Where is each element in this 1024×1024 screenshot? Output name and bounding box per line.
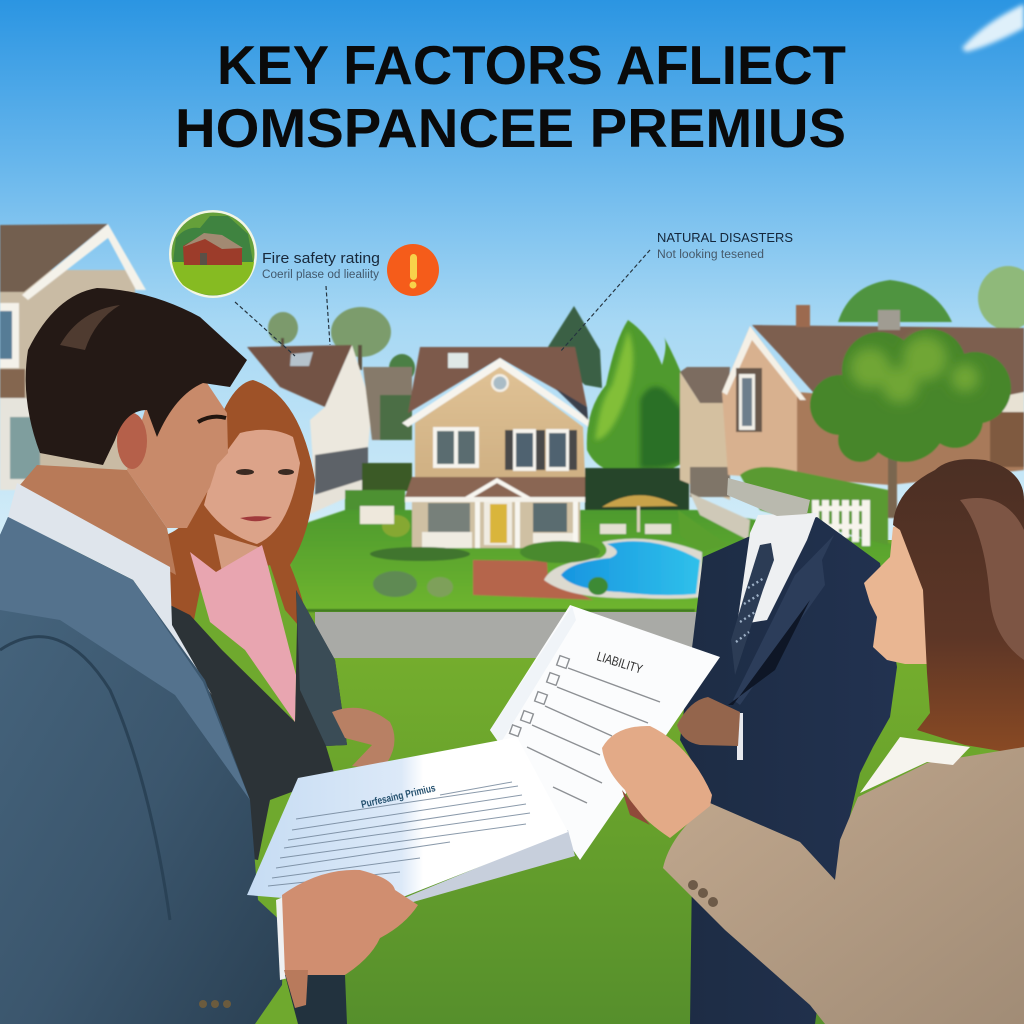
right house [722, 305, 1024, 485]
eyes and lips [236, 469, 294, 475]
side path and lawn by patio [690, 493, 750, 540]
neck [20, 465, 176, 575]
title [175, 34, 846, 159]
right hedge [740, 467, 888, 545]
body lines [268, 782, 530, 886]
blazer [663, 747, 1024, 1024]
cloud [962, 4, 1024, 52]
callout: fire safety rating [169, 210, 439, 298]
swimming pool [544, 539, 702, 599]
lawn edge [300, 609, 695, 612]
cuff [737, 713, 743, 760]
callout: natural disasters: NATURAL DISASTERS [657, 230, 793, 245]
blazer [0, 517, 285, 1024]
neighbouring white house [247, 345, 412, 515]
hand on sheet [677, 697, 740, 746]
man in navy suit [677, 478, 897, 1024]
policy document stack [247, 737, 575, 910]
dark blazer [160, 590, 347, 860]
hand [332, 708, 394, 770]
callout text [262, 251, 380, 281]
left house [0, 224, 146, 490]
woman's hand and dark trousers below sleeve [284, 970, 347, 1024]
patterned tie [731, 543, 774, 675]
hair [893, 459, 1024, 755]
large green tree [587, 320, 702, 473]
dark fence behind patio [585, 468, 689, 510]
icon: warning badge [387, 244, 439, 296]
centre house [402, 347, 597, 548]
patio umbrella [600, 495, 678, 534]
dashed leader lines [235, 250, 650, 356]
callout text: Fire safety rating [262, 251, 380, 267]
hair [26, 288, 247, 465]
woman with red hair [137, 380, 394, 860]
foreground lawn [320, 658, 980, 1024]
woman in tan blazer [602, 459, 1024, 1024]
garden path [473, 560, 593, 600]
tree cluster left of centre [268, 307, 415, 382]
far right house [680, 367, 730, 500]
sky background [0, 0, 1024, 540]
sheet heading: LIABILITY [595, 649, 645, 677]
shirt collar [8, 483, 212, 695]
road [315, 612, 715, 658]
hedge and lawn behind houses [362, 463, 412, 491]
right foreground tree [810, 329, 1011, 518]
man in grey-blue suit [0, 288, 285, 1024]
sleeve buttons [688, 880, 718, 907]
white fence [812, 500, 870, 546]
suit [680, 517, 897, 1024]
shirt and collar [737, 513, 817, 625]
checkboxes and rows [510, 656, 660, 803]
hair [137, 380, 315, 640]
document heading: Purfesaing Primius [360, 782, 437, 811]
hand holding sheet [602, 726, 712, 838]
mid lawn [285, 510, 900, 612]
background trees and neighbourhood [0, 224, 1024, 612]
shrubs in the mid lawn [360, 506, 608, 597]
white collar [860, 737, 970, 793]
liability checklist sheet [490, 605, 720, 860]
face [864, 520, 960, 664]
face [204, 430, 300, 544]
sleeve buttons [199, 1000, 231, 1008]
tall pine behind centre house [546, 306, 602, 388]
pink shirt [190, 545, 296, 722]
blanked head [727, 478, 810, 516]
face [127, 377, 228, 528]
icon: house in circle [169, 210, 257, 298]
distant tree at right [838, 280, 952, 322]
lapel [733, 535, 834, 705]
callout text: Coeril plase od liealiity [262, 269, 379, 281]
callout: natural disasters: Not looking tesened [657, 249, 764, 261]
title: KEY FACTORS AFLIECT [217, 34, 846, 96]
title: HOMSPANCEE PREMIUS [175, 97, 846, 159]
callout: natural disasters [657, 230, 793, 261]
man's hand and cuff holding documents [276, 870, 418, 981]
